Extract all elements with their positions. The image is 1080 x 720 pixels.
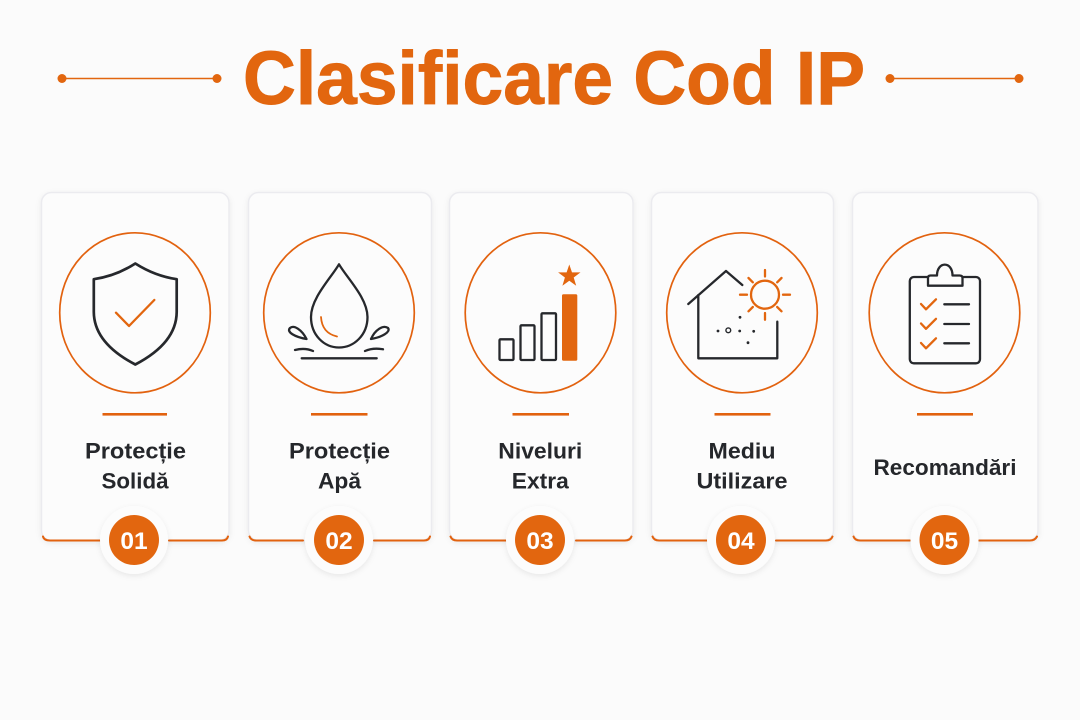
icon: house with sun and dust: [688, 270, 790, 358]
number badge: 02: [325, 528, 353, 555]
divider: [917, 413, 973, 416]
panel: card 02 Protecție Apă: [248, 192, 432, 574]
divider: [512, 413, 569, 416]
icon ring: [264, 233, 414, 393]
divider: [714, 413, 770, 416]
number badge: [707, 506, 775, 574]
title ornament: right line: [886, 74, 1024, 83]
number badge: [100, 506, 168, 574]
number badge: [305, 506, 373, 574]
label: [85, 438, 186, 494]
title ornament: left line: [58, 74, 222, 83]
label: Niveluri: [498, 438, 582, 464]
panel: card 03 Niveluri Extra: [450, 192, 633, 574]
panel: card 04 Mediu Utilizare: [652, 192, 834, 574]
panel: card 05 Recomandări: [852, 192, 1038, 574]
icon: water drop with splash: [289, 264, 389, 358]
label: Extra: [512, 468, 570, 494]
number badge: 01: [120, 528, 148, 555]
label: Utilizare: [696, 468, 788, 494]
label: Protecție: [85, 438, 186, 464]
divider: [102, 413, 167, 416]
label: Mediu: [708, 438, 776, 464]
icon ring: [465, 233, 616, 393]
label: Solidă: [102, 468, 169, 494]
label: [498, 438, 582, 494]
icon ring: [869, 233, 1020, 393]
label: Apă: [318, 468, 362, 494]
icon: rising bars with star: [500, 264, 580, 361]
label: [696, 438, 788, 494]
divider: [311, 413, 368, 416]
label: Protecție: [289, 438, 390, 464]
label: Recomandări: [874, 455, 1016, 480]
number badge: [506, 506, 574, 574]
number badge: 04: [727, 528, 755, 555]
number badge: 05: [931, 528, 958, 555]
title: Clasificare Cod IP: [243, 36, 865, 120]
icon: clipboard checklist: [910, 265, 980, 363]
panel: card 01 Protecție Solidă: [42, 192, 229, 574]
icon ring: [60, 233, 210, 393]
number badge: 03: [526, 528, 554, 555]
number badge: [910, 506, 978, 574]
label: [289, 438, 390, 494]
icon: shield with check: [94, 264, 177, 364]
icon ring: [667, 233, 817, 393]
